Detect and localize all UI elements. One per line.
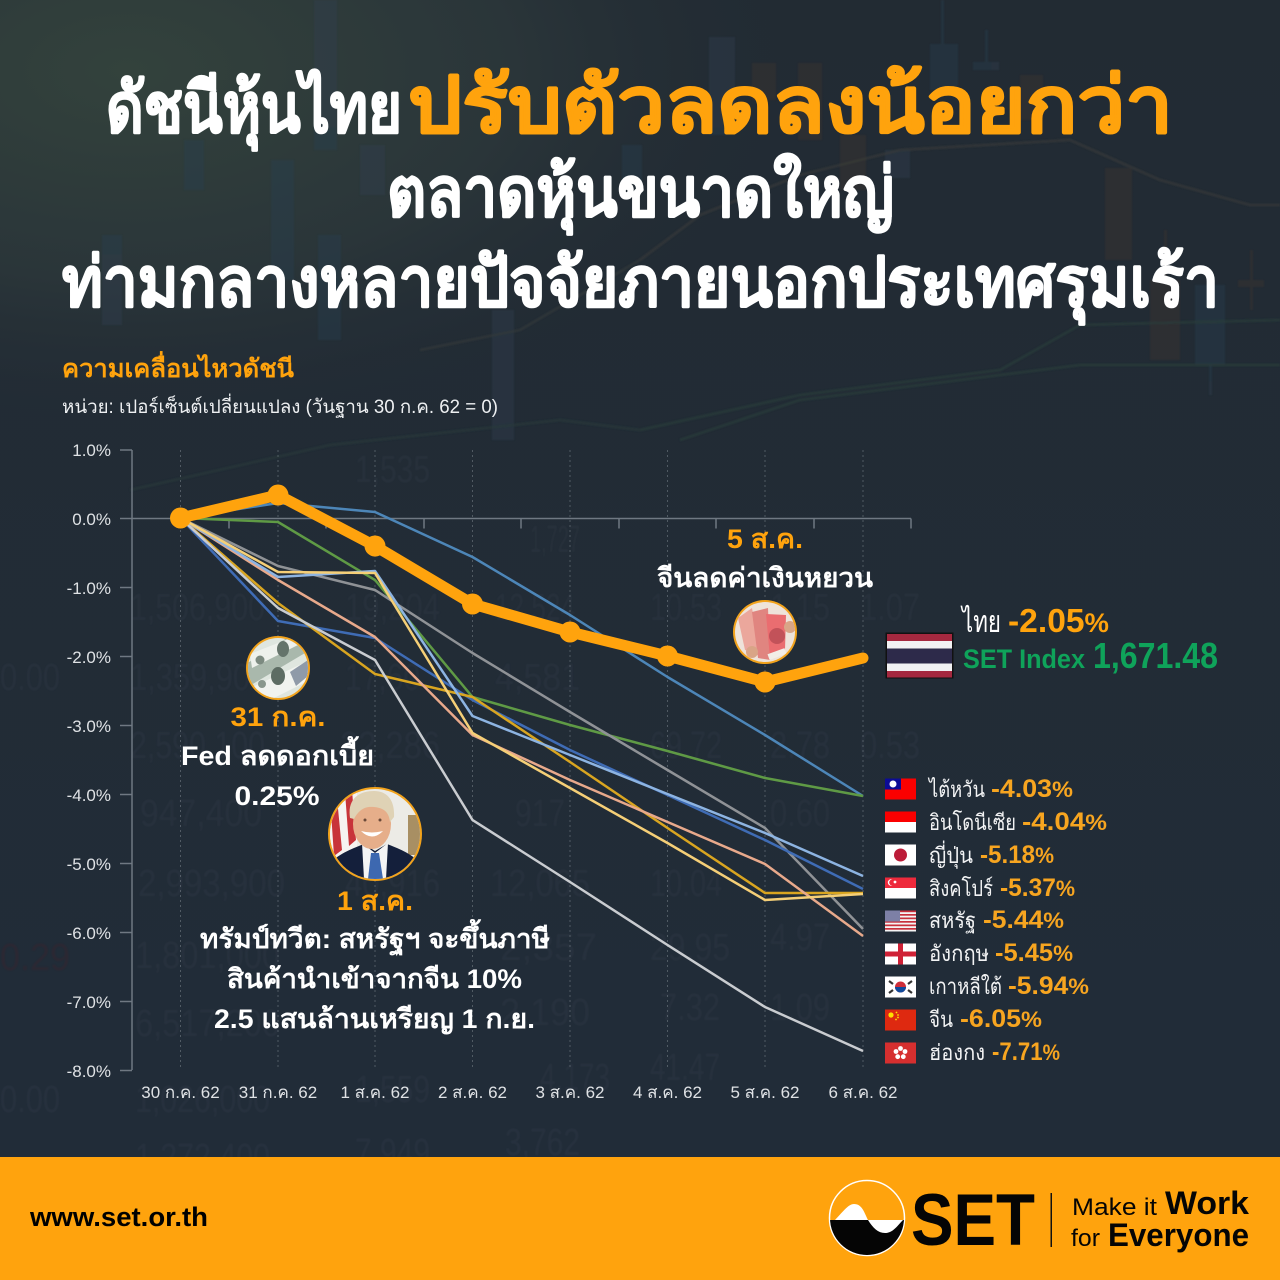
x axis labels: 30 ก.ค. 62 bbox=[141, 1083, 220, 1102]
legend: Thailand: -2.05% bbox=[1008, 602, 1109, 639]
annotation: 31 July: 0.25% bbox=[234, 781, 320, 811]
line chart bbox=[67, 441, 911, 1102]
annotation: 1 August bbox=[200, 886, 550, 1035]
background: dark market chart: 1.07 bbox=[860, 587, 920, 629]
background: dark market chart: 0.60 bbox=[770, 793, 830, 835]
background: dark market chart: 947,400 bbox=[140, 793, 262, 835]
annotation: 31 July: 31 ก.ค. bbox=[230, 702, 326, 732]
background: dark market chart: 1.15 bbox=[770, 587, 830, 629]
legend: other markets: -6.05% bbox=[960, 1005, 1042, 1033]
background: dark market chart: 41.47 bbox=[650, 1047, 720, 1089]
background: dark market chart: 40,916 bbox=[345, 863, 440, 905]
x axis labels: 2 ส.ค. 62 bbox=[438, 1083, 507, 1102]
website url: www.set.or.th bbox=[29, 1202, 208, 1232]
icon: US dollar notes bbox=[246, 636, 310, 700]
legend labels and values: ฮ่องกง bbox=[929, 1040, 985, 1065]
tagline: Work bbox=[1165, 1185, 1249, 1221]
annotation: 5 August: จีนลดค่าเงินหยวน bbox=[657, 563, 874, 593]
x axis labels: 6 ส.ค. 62 bbox=[828, 1083, 898, 1102]
background: dark market chart: 10.53 bbox=[650, 587, 722, 629]
background: dark market chart: 12,524 bbox=[495, 587, 575, 629]
background: dark market chart: 1,727 bbox=[530, 519, 580, 561]
legend labels and values: ไต้หวัน bbox=[927, 777, 985, 802]
background: dark market chart: 19,204 bbox=[345, 587, 440, 629]
background: dark market chart: 6,517,200 bbox=[135, 1003, 280, 1045]
legend: other markets: -5.94% bbox=[1008, 972, 1089, 1000]
title: ตลาดหุ้นขนาดใหญ่ bbox=[387, 152, 894, 236]
title bbox=[62, 61, 1219, 326]
flag: England bbox=[885, 944, 916, 964]
background: dark market chart: 4,581 bbox=[495, 657, 580, 699]
legend labels and values: อังกฤษ bbox=[929, 941, 989, 966]
chart unit note: หน่วย: เปอร์เซ็นต์เปลี่ยนแปลง (วันฐาน 30 ก.ค. 62 = 0) bbox=[62, 393, 498, 418]
legend: other markets: -5.18% bbox=[980, 841, 1054, 869]
tagline: Everyone bbox=[1108, 1217, 1249, 1253]
legend: Thailand: SET Index bbox=[963, 644, 1085, 674]
SET logo bbox=[828, 1180, 1035, 1261]
title: ปรับตัวลดลงน้อยกว่า bbox=[408, 61, 1173, 149]
legend: other markets: -4.04 % bbox=[1022, 808, 1107, 836]
background: dark market chart: 1,801,000 bbox=[135, 935, 280, 977]
background: dark market chart: 1,272,400 bbox=[135, 1137, 270, 1179]
flag: South Korea bbox=[885, 976, 916, 998]
legend labels and values: จีน bbox=[929, 1007, 953, 1032]
x axis labels: 1 ส.ค. 62 bbox=[340, 1083, 410, 1102]
x axis labels: 5 ส.ค. 62 bbox=[730, 1083, 800, 1102]
title: ดัชนีหุ้นไทย bbox=[106, 68, 402, 152]
legend labels and values bbox=[927, 777, 1016, 1065]
y axis labels: 0.0% bbox=[72, 510, 111, 529]
flag: Japan bbox=[885, 844, 916, 866]
annotation: 1 August: 1 ส.ค. bbox=[337, 886, 413, 916]
background: dark market chart: 17,60 bbox=[345, 657, 420, 699]
background: dark market chart: 69.72 bbox=[650, 725, 722, 767]
legend: Thailand: 1,671.48 bbox=[1093, 635, 1218, 676]
legend: Thailand: ไทย bbox=[961, 604, 1001, 639]
background: dark market chart: 4.97 bbox=[770, 917, 830, 959]
legend: other markets: -4.03% bbox=[991, 775, 1073, 803]
legend labels and values: ญี่ปุ่น bbox=[929, 840, 973, 869]
background: dark market chart: 1,359,90 bbox=[130, 657, 250, 699]
flag: China bbox=[885, 1010, 916, 1030]
background: dark market chart: 2.78 bbox=[770, 725, 830, 767]
background: dark market chart: 2,357 bbox=[500, 927, 597, 969]
background: dark market chart: 12,065 bbox=[490, 863, 590, 905]
legend labels and values: อินโดนีเซีย bbox=[929, 810, 1016, 835]
background: dark market chart: 1.09 bbox=[770, 987, 830, 1029]
tagline bbox=[1071, 1185, 1249, 1253]
y axis labels: -7.0% bbox=[67, 993, 111, 1012]
flag: Taiwan bbox=[885, 778, 916, 800]
legend labels and values: สหรัฐ bbox=[929, 908, 976, 934]
background: dark market chart: 2,590,100 bbox=[130, 725, 265, 767]
annotation: 31 July: Fed ลดดอกเบี้ย bbox=[181, 735, 374, 771]
background: dark market chart: 917 bbox=[515, 793, 565, 835]
annotation: 31 July bbox=[181, 702, 374, 811]
icon: Trump portrait bbox=[328, 787, 422, 881]
background: dark market chart: 0.00 bbox=[0, 657, 60, 699]
background: dark market chart: 0.29 bbox=[0, 937, 70, 979]
background: dark market chart: 0.00 bbox=[0, 1079, 60, 1121]
background: dark market chart: 1,559 bbox=[355, 1069, 430, 1111]
legend: other markets: -5.44% bbox=[983, 906, 1064, 934]
legend: Thailand bbox=[886, 602, 1218, 678]
background: dark market chart: 1,026,000 bbox=[135, 1079, 270, 1121]
background: dark market chart: 1,506,900 bbox=[130, 587, 265, 629]
x axis labels: 4 ส.ค. 62 bbox=[633, 1083, 702, 1102]
background: dark market chart: 1,535 bbox=[355, 449, 430, 491]
chart heading: ความเคลื่อนไหวดัชนี bbox=[62, 351, 294, 383]
background: dark market chart: 4,173 bbox=[540, 1057, 610, 1099]
series: other markets bbox=[180, 503, 863, 1051]
footer band bbox=[0, 1157, 1280, 1280]
background: dark market chart: 10.04 bbox=[650, 863, 722, 905]
flag: Singapore bbox=[885, 878, 916, 898]
annotation: 1 August: ทรัมป์ทวีต: สหรัฐฯ จะขึ้นภาษี bbox=[200, 918, 550, 957]
x axis labels: 31 ก.ค. 62 bbox=[239, 1083, 317, 1102]
annotation: 5 August bbox=[657, 524, 874, 593]
background: dark market chart: 3,762 bbox=[505, 1122, 580, 1164]
y axis labels: 1.0% bbox=[72, 441, 111, 460]
background: dark market chart: 2,190 bbox=[500, 992, 590, 1034]
y axis labels: -4.0% bbox=[67, 786, 111, 805]
background: dark market chart: 2,993,900 bbox=[138, 863, 285, 905]
y axis labels: -5.0% bbox=[67, 855, 111, 874]
legend: other markets: -7.71% bbox=[992, 1038, 1060, 1066]
background: dark market chart: 29.95 bbox=[650, 927, 730, 969]
annotation: 5 August: 5 ส.ค. bbox=[727, 524, 803, 554]
flag: Indonesia bbox=[885, 812, 916, 832]
y axis labels: -2.0% bbox=[67, 648, 111, 667]
background: dark market chart: 7.32 bbox=[660, 987, 720, 1029]
series: Thailand SET index bbox=[170, 484, 863, 692]
legend: other markets: -5.37% bbox=[1000, 874, 1075, 902]
annotation: 1 August: 2.5 แสนล้านเหรียญ 1 ก.ย. bbox=[214, 1004, 535, 1035]
tagline: for bbox=[1071, 1225, 1100, 1252]
y axis labels: -1.0% bbox=[67, 579, 111, 598]
background: dark market chart: 0.53 bbox=[860, 725, 920, 767]
x axis labels: 3 ส.ค. 62 bbox=[535, 1083, 605, 1102]
y axis labels: -8.0% bbox=[67, 1062, 111, 1081]
y axis labels: -6.0% bbox=[67, 924, 111, 943]
legend labels and values: สิงคโปร์ bbox=[929, 876, 993, 901]
y axis labels bbox=[67, 441, 111, 1081]
legend: other markets bbox=[885, 775, 1107, 1066]
icon: yuan notes bbox=[733, 600, 797, 664]
flag: Hong Kong bbox=[885, 1042, 916, 1064]
y axis labels: -3.0% bbox=[67, 717, 111, 736]
flag: United States bbox=[885, 910, 916, 932]
legend labels and values: เกาหลีใต้ bbox=[929, 974, 1002, 999]
tagline: Make it bbox=[1072, 1194, 1157, 1221]
background: dark market chart: 7,949 bbox=[355, 1132, 430, 1174]
annotation: 1 August: สินค้านำเข้าจากจีน 10% bbox=[227, 964, 522, 994]
x axis labels bbox=[141, 1083, 898, 1102]
SET logo: SET bbox=[911, 1180, 1035, 1261]
background: dark market chart: 22,286 bbox=[340, 725, 440, 767]
icon: flag of Thailand bbox=[886, 632, 954, 678]
legend: other markets: -5.45% bbox=[995, 939, 1073, 967]
